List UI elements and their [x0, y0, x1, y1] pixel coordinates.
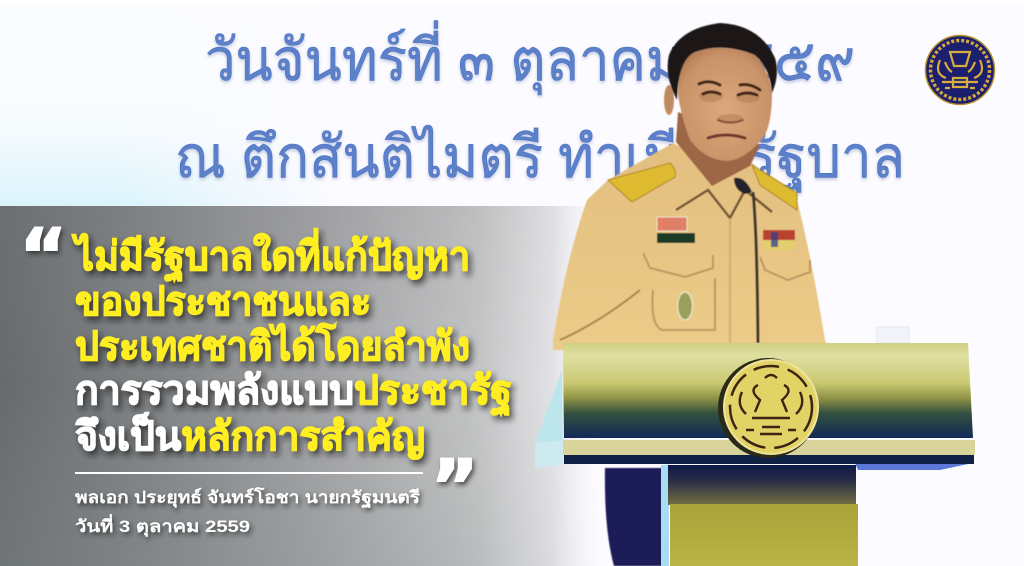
- divider line: [75, 472, 423, 474]
- ear: [664, 85, 674, 115]
- closing quotation mark: ”: [431, 444, 478, 528]
- hair: [668, 23, 777, 100]
- lectern: [535, 343, 975, 566]
- lectern underside: [855, 463, 973, 470]
- main quote: ไม่มีรัฐบาลใดที่แก้ปัญหา: [71, 228, 470, 283]
- translucent grey quote panel: [0, 206, 600, 566]
- lectern emblem: [718, 358, 818, 458]
- torso and arms: [553, 143, 829, 350]
- facial shading: [699, 90, 760, 124]
- facial features: [699, 82, 760, 138]
- shirt pockets: [560, 253, 810, 340]
- lectern left side: [535, 370, 563, 468]
- attribution: [75, 487, 421, 537]
- lectern front: [563, 343, 973, 438]
- main quote: การรวมพลังแบบประชารัฐ: [75, 369, 512, 417]
- rank badge: [657, 217, 687, 231]
- cabinet secretariat logo: [926, 36, 994, 104]
- attribution: วันที่ 3 ตุลาคม 2559: [75, 514, 250, 537]
- microphone: [734, 178, 758, 343]
- main quote: จึงเป็นหลักการสำคัญ: [75, 411, 425, 460]
- face: [678, 48, 772, 161]
- epaulettes: [608, 163, 675, 202]
- brooch: [678, 292, 692, 320]
- water glass: [877, 327, 909, 343]
- backdrop text: event date and venue: ณ ตึกสันติไมตรี ทำเนียบรัฐบาล: [175, 124, 905, 192]
- lectern post: [661, 465, 669, 566]
- main quote: ของประชาชนและ: [75, 280, 371, 324]
- attribution: พลเอก ประยุทธ์ จันทร์โอชา นายกรัฐมนตรี: [75, 487, 421, 509]
- main quote: ประเทศชาติได้โดยลำพัง: [75, 323, 470, 369]
- neck: [676, 112, 760, 186]
- backdrop text: event date and venue: [175, 20, 905, 192]
- opening quotation mark: “: [20, 213, 67, 297]
- backdrop text: event date and venue: วันจันทร์ที่ ๓ ตุลาคม ๒๕๕๙: [205, 20, 855, 96]
- photo: speaker in uniform: [553, 23, 909, 566]
- lectern band: [563, 440, 975, 455]
- collar: [676, 190, 772, 218]
- name plate: [657, 233, 695, 243]
- main quote: [71, 228, 512, 460]
- medal ribbons: [763, 230, 795, 250]
- legs: [605, 468, 662, 566]
